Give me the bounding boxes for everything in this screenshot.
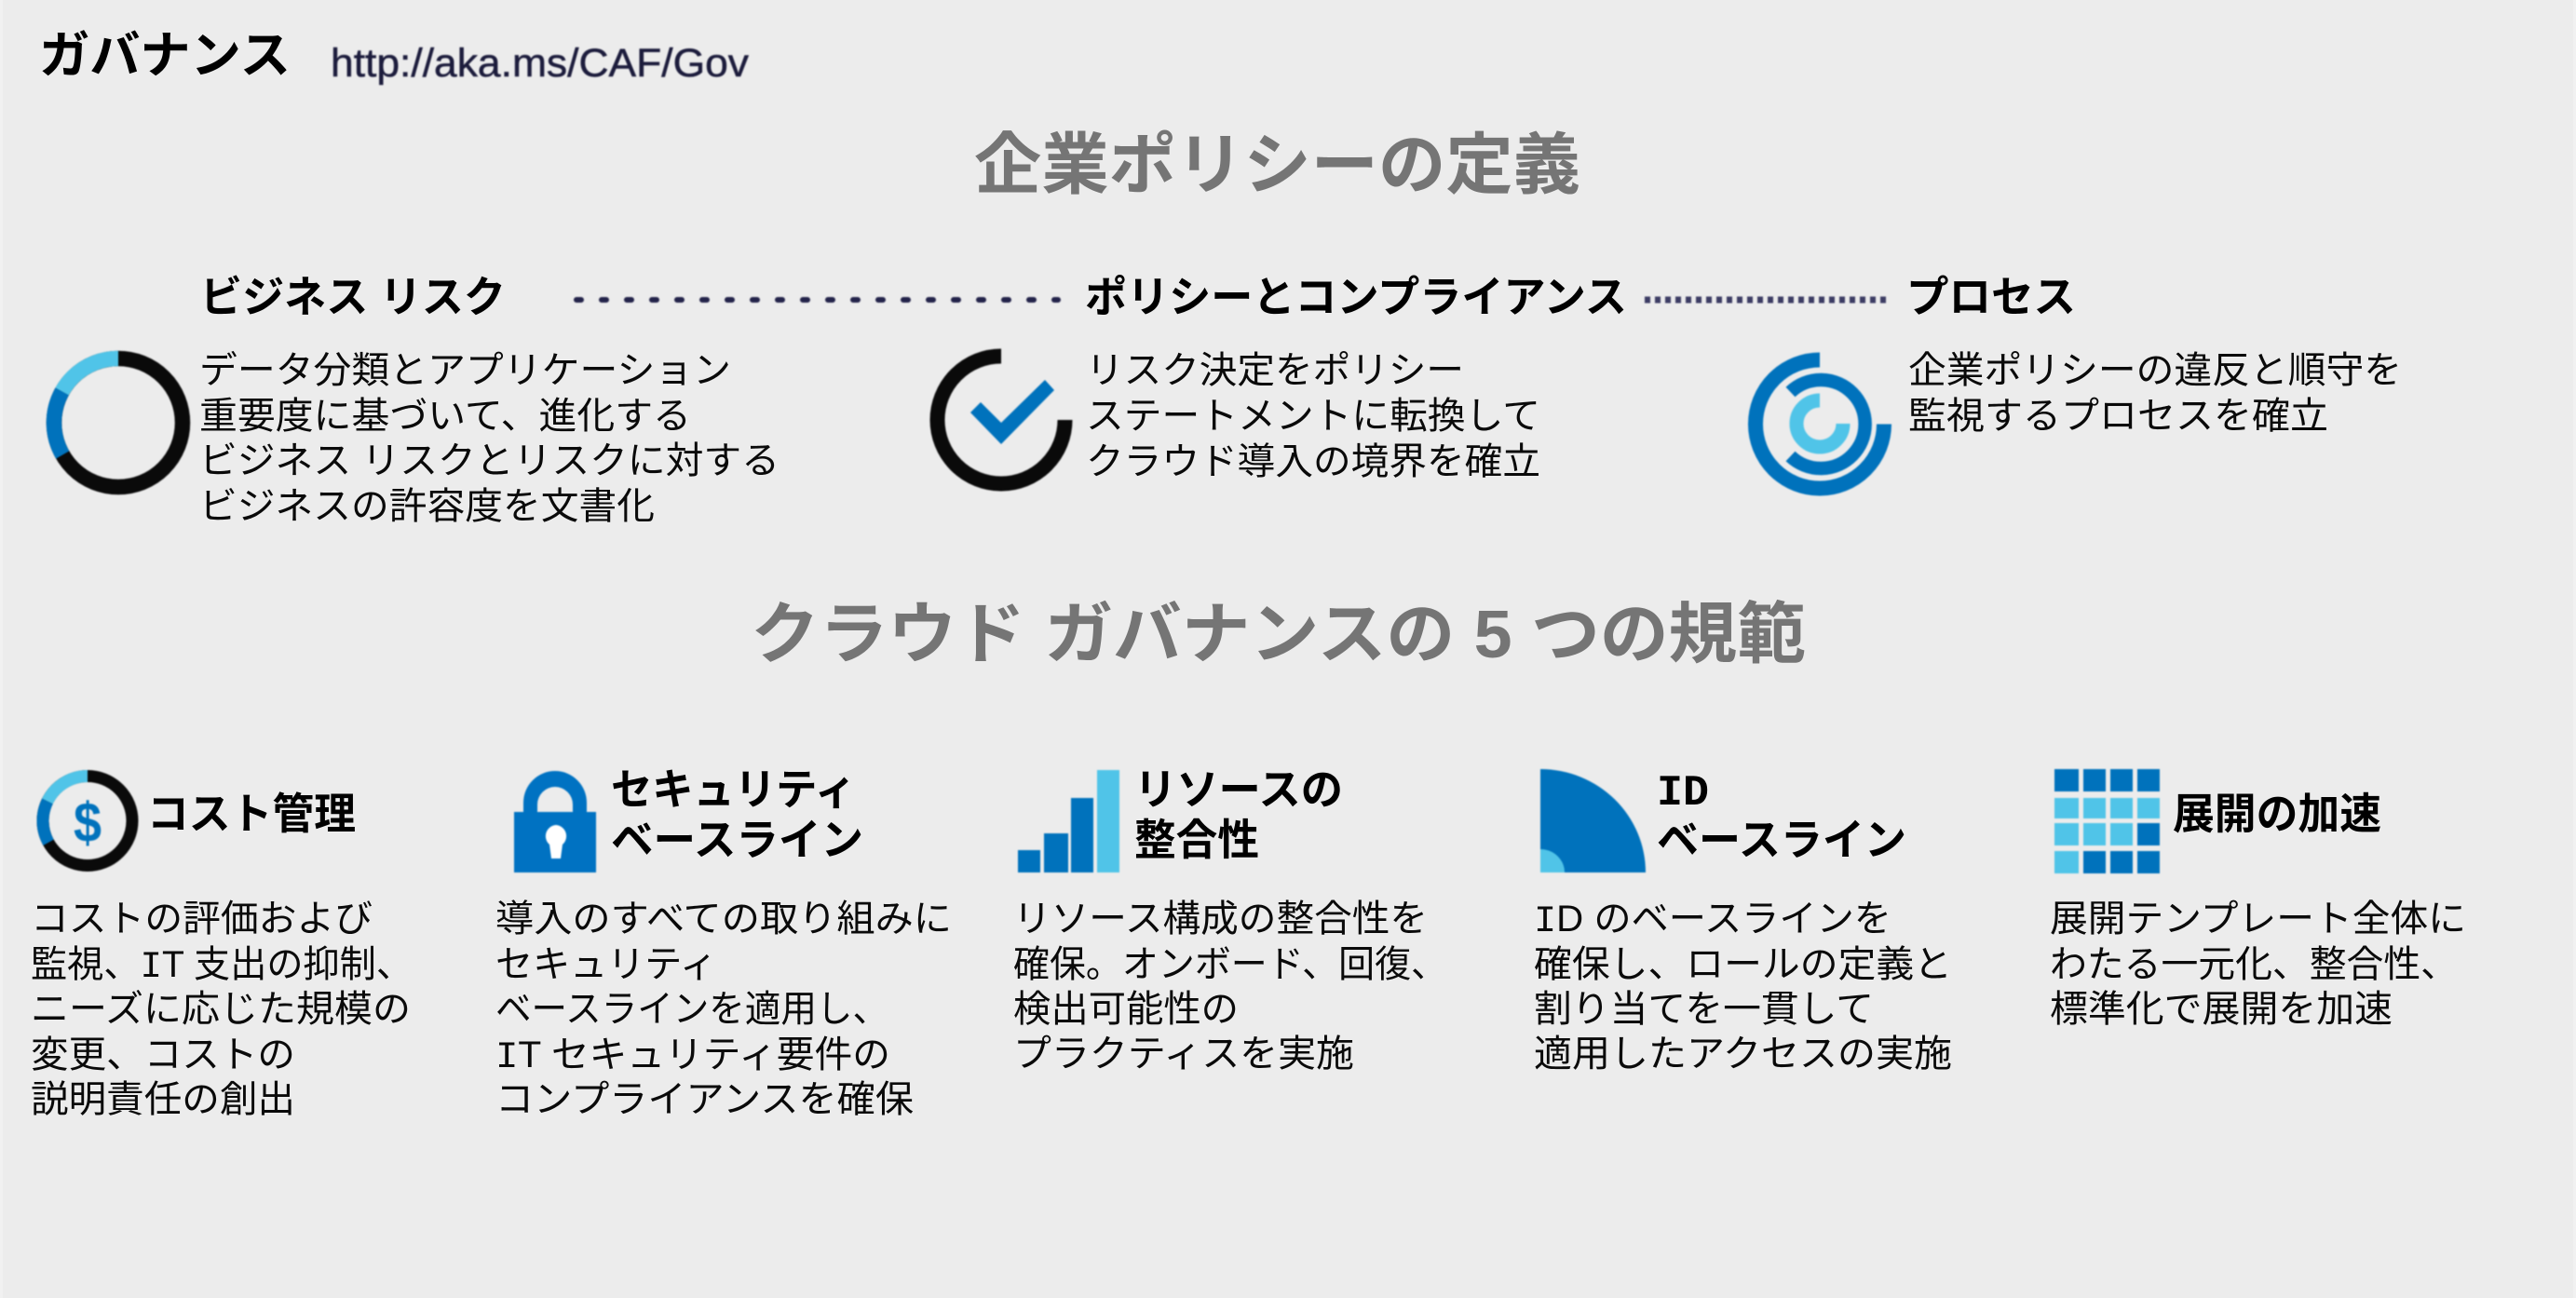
heading: identity baseline: ベースライン: [1657, 816, 1906, 864]
text block: business risk: ビジネス リスクとリスクに対する: [199, 440, 780, 481]
icon: padlock: [514, 771, 596, 872]
text block: identity baseline: 適用したアクセスの実施: [1534, 1034, 1952, 1075]
text block: identity baseline: [1534, 899, 1952, 1075]
text block: identity baseline: ID のベースラインを: [1534, 899, 1891, 943]
text block: cost management: 監視、IT 支出の抑制、: [31, 944, 413, 989]
text block: business risk: 重要度に基づいて、進化する: [199, 396, 691, 437]
text block: deployment acceleration: [2050, 899, 2466, 1030]
text block: process: 企業ポリシーの違反と順守を: [1908, 350, 2402, 391]
link: url: http://aka.ms/CAF/Gov: [331, 41, 750, 86]
text block: policy and compliance: ステートメントに転換して: [1086, 396, 1540, 437]
panel: process: [1756, 273, 2402, 488]
heading: identity baseline: ID: [1657, 769, 1709, 818]
panel: deployment acceleration: [2050, 769, 2466, 1030]
heading: security baseline: [611, 765, 863, 864]
icon: quarter shape: [1540, 769, 1646, 872]
text block: policy and compliance: リスク決定をポリシー: [1086, 350, 1464, 391]
text block: business risk: ビジネスの許容度を文書化: [199, 486, 655, 527]
panel: identity baseline: [1534, 769, 1952, 1075]
icon: tile grid: [2054, 769, 2160, 873]
text block: cost management: ニーズに応じた規模の: [31, 989, 411, 1030]
icon: concentric arcs: [1756, 359, 1884, 488]
text block: deployment acceleration: わたる一元化、整合性、: [2050, 944, 2458, 985]
text block: resource consistency: 検出可能性の: [1013, 989, 1239, 1030]
heading: corporate policy: 企業ポリシーの定義: [974, 128, 1580, 203]
panel: resource consistency: [1013, 765, 1447, 1075]
icon: dollar ring: $: [74, 791, 102, 854]
icon: dollar ring: [43, 777, 132, 866]
text block: policy and compliance: [1086, 350, 1540, 482]
text block: identity baseline: 割り当てを一貫して: [1534, 989, 1874, 1030]
text block: resource consistency: 確保。オンボード、回復、: [1013, 944, 1447, 985]
text block: business risk: データ分類とアプリケーション: [199, 350, 731, 391]
text block: cost management: 説明責任の創出: [31, 1079, 295, 1120]
heading: security baseline: セキュリティ: [611, 765, 856, 814]
panel: business risk: [54, 273, 780, 527]
heading: resource consistency: 整合性: [1134, 816, 1259, 864]
text block: cost management: コストの評価および: [31, 899, 373, 940]
heading: business risk: ビジネス リスク: [200, 273, 506, 321]
text block: security baseline: 導入のすべての取り組みに: [495, 899, 952, 940]
text block: security baseline: ベースラインを適用し、: [495, 989, 888, 1030]
text block: business risk: [199, 350, 780, 527]
text block: deployment acceleration: 展開テンプレート全体に: [2050, 899, 2466, 940]
text block: resource consistency: リソース構成の整合性を: [1013, 899, 1428, 940]
icon: check ring: [937, 356, 1065, 484]
heading: identity baseline: [1657, 769, 1906, 864]
text block: process: [1908, 350, 2402, 437]
panel: cost management: [31, 777, 413, 1120]
heading: resource consistency: [1134, 765, 1343, 864]
text block: identity baseline: 確保し、ロールの定義と: [1534, 944, 1952, 985]
text block: resource consistency: [1013, 899, 1447, 1075]
heading: policy and compliance: ポリシーとコンプライアンス: [1085, 273, 1627, 321]
heading: five disciplines: クラウド ガバナンスの 5 つの規範: [751, 598, 1806, 672]
text block: cost management: [31, 899, 413, 1120]
text block: security baseline: コンプライアンスを確保: [495, 1079, 914, 1120]
panel: security baseline: [495, 765, 952, 1120]
text block: process: 監視するプロセスを確立: [1908, 396, 2328, 437]
heading: process: プロセス: [1906, 273, 2076, 321]
panel: policy and compliance: [937, 273, 1627, 484]
text block: security baseline: セキュリティ: [495, 944, 717, 985]
heading: cost management: コスト管理: [147, 790, 356, 838]
text block: cost management: 変更、コストの: [31, 1034, 295, 1075]
icon: bars: [1018, 770, 1119, 872]
text block: security baseline: [495, 899, 952, 1120]
text block: security baseline: IT セキュリティ要件の: [495, 1034, 890, 1079]
heading: security baseline: ベースライン: [611, 816, 863, 864]
heading: resource consistency: リソースの: [1134, 765, 1343, 814]
text block: policy and compliance: クラウド導入の境界を確立: [1086, 441, 1540, 482]
heading: deployment acceleration: 展開の加速: [2173, 790, 2381, 838]
text block: deployment acceleration: 標準化で展開を加速: [2050, 989, 2393, 1030]
title: ガバナンス: [39, 28, 291, 84]
text block: resource consistency: プラクティスを実施: [1013, 1034, 1354, 1075]
icon: donut ring: [54, 358, 183, 487]
